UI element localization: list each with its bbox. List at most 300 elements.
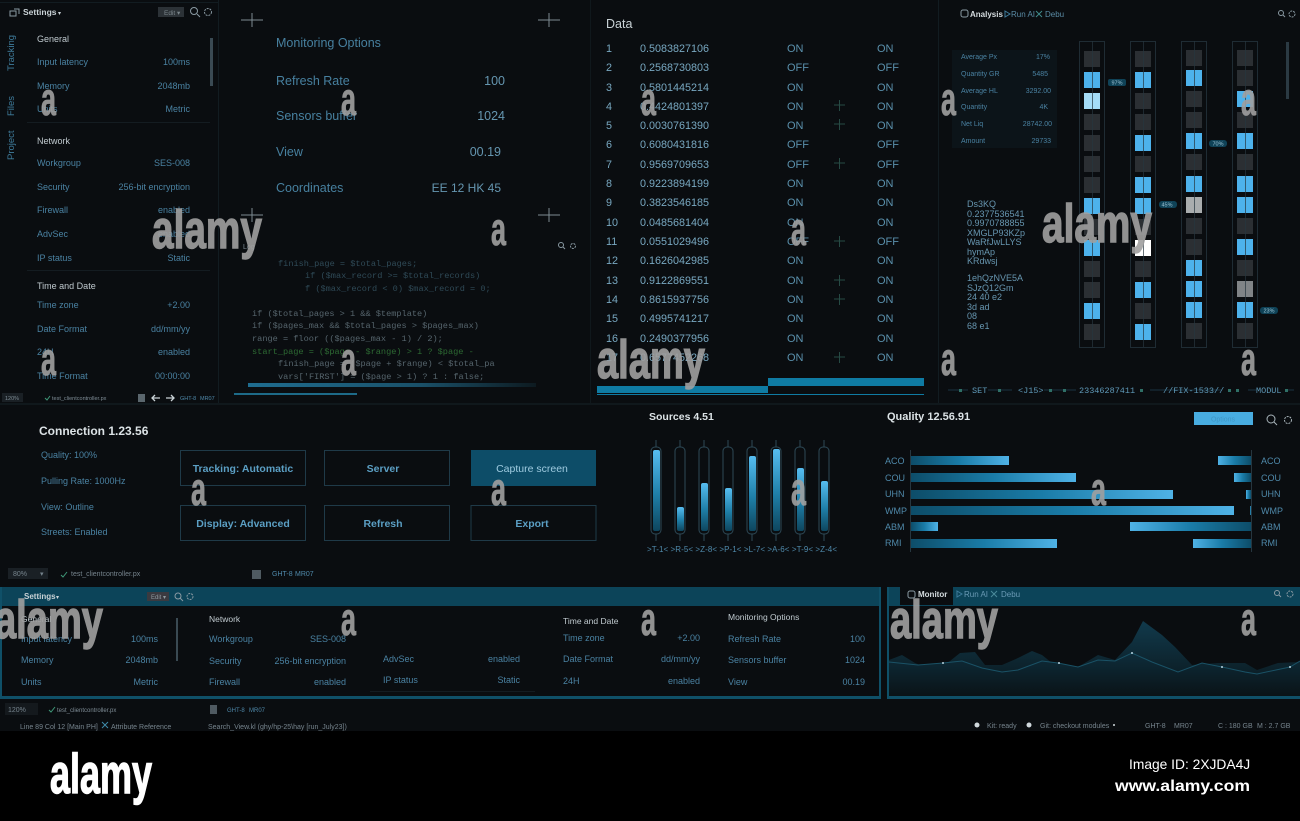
footer logo: alamy <box>50 742 152 805</box>
sidebar status bar: MR07 <box>200 396 215 402</box>
data rows: ON <box>877 333 894 345</box>
sources heading: Sources 4.51 <box>649 411 714 423</box>
code listing: if ($total_pages > 1 && $template) <box>252 309 427 319</box>
bottom general settings <box>21 614 178 687</box>
analysis text readout <box>967 199 1025 331</box>
panel: monitoring options <box>241 13 560 222</box>
general settings: General <box>37 34 69 44</box>
monitoring rows: Coordinates <box>276 181 343 195</box>
data rows: ON <box>877 255 894 267</box>
button: capture screen: Capture screen <box>496 463 568 475</box>
watermark: alamy marks: a <box>1241 593 1256 645</box>
general settings: 100ms <box>163 57 190 67</box>
status bar: test_clientcontroller.px <box>57 708 116 714</box>
cell column 3 <box>1186 50 1202 339</box>
data rows: ON <box>787 120 804 132</box>
general settings: Metric <box>166 104 190 114</box>
bottom network settings: enabled <box>314 677 346 687</box>
monitoring heading: Monitoring Options <box>276 36 381 50</box>
vertical tabs: Files <box>6 96 17 116</box>
row markers <box>834 100 845 363</box>
data heading: Data <box>606 17 632 31</box>
cell column 2 <box>1135 51 1151 340</box>
search and gear icons <box>1267 415 1292 425</box>
watermark: alamy marks: a <box>791 203 806 255</box>
analysis text readout: hymAp <box>967 247 995 257</box>
data progress bars <box>597 378 924 395</box>
bottom network settings: Firewall <box>209 677 240 687</box>
network settings <box>27 136 210 271</box>
bottom network settings: SES-008 <box>310 634 346 644</box>
analysis stats table: 3292.00 <box>1026 88 1051 95</box>
button: display <box>180 506 306 540</box>
analysis ticker strip: SET <box>972 386 987 396</box>
data rows: ON <box>787 294 804 306</box>
data rows: OFF <box>877 236 899 248</box>
panel: monitor chart <box>887 587 1300 699</box>
settings header: Edit ▾ <box>164 10 181 17</box>
cell column 1 <box>1084 51 1100 340</box>
status bar: Line 89 Col 12 [Main PH] <box>20 724 98 731</box>
analysis stats table: Average Px <box>961 54 998 61</box>
panel: data table <box>597 17 924 395</box>
data rows: 3 <box>606 82 612 94</box>
bottom network settings: 256-bit encryption <box>274 656 346 666</box>
status bar <box>5 703 1291 731</box>
data rows: OFF <box>787 62 809 74</box>
bottom general settings: 2048mb <box>125 655 158 665</box>
bottom network settings: IP status <box>383 675 418 685</box>
data rows: 0.4995741217 <box>640 313 709 325</box>
code listing: f ($max_record < 0) $max_record = 0; <box>305 284 491 294</box>
bottom monitoring options: Refresh Rate <box>728 634 781 644</box>
watermark: alamy marks: alamy <box>597 330 705 390</box>
bottom network settings: enabled <box>488 654 520 664</box>
network settings: 256-bit encryption <box>118 182 190 192</box>
panel: code log <box>234 242 576 395</box>
zoom and file status: GHT-8 <box>272 571 293 578</box>
connection details: View: Outline <box>41 502 94 512</box>
analysis header: Debu <box>1045 10 1064 19</box>
monitor header: Monitor <box>918 590 947 599</box>
analysis text readout: 68 e1 <box>967 321 990 331</box>
data rows: 0.0485681404 <box>640 217 709 229</box>
crosshair markers <box>241 13 560 222</box>
data rows: 7 <box>606 159 612 171</box>
analysis stats table: 5485 <box>1032 71 1048 78</box>
analysis stats table: 29733 <box>1032 138 1051 145</box>
bottom time and date settings: enabled <box>668 676 700 686</box>
data rows: 11 <box>606 236 617 248</box>
left bar labels: COU <box>885 473 905 483</box>
watermark: alamy marks: a <box>641 73 656 125</box>
data rows: ON <box>877 217 894 229</box>
quality action button <box>1194 412 1253 425</box>
bottom network settings: Static <box>497 675 520 685</box>
code listing <box>252 259 495 382</box>
bottom settings header: Settings <box>24 592 56 601</box>
time and date settings: +2.00 <box>167 300 190 310</box>
panel: bottom settings <box>0 587 881 699</box>
panel: sources sliders <box>647 411 837 554</box>
vertical tabs: Tracking <box>6 35 17 71</box>
status bar: 120% <box>8 707 26 714</box>
bottom general settings: Units <box>21 677 42 687</box>
analysis stats table <box>952 50 1057 148</box>
zoom and file status: ▾ <box>40 571 44 578</box>
code listing: if ($max_record >= $total_records) <box>305 271 480 281</box>
data rows: ON <box>877 120 894 132</box>
watermark: alamy marks: a <box>491 463 506 515</box>
quality heading: Quality 12.56.91 <box>887 411 970 423</box>
vertical tabs: Project <box>6 130 17 160</box>
bottom monitoring options: View <box>728 677 748 687</box>
zoom and file status: test_clientcontroller.px <box>71 571 141 578</box>
status bar: C : 180 GB <box>1218 723 1253 730</box>
data rows: 12 <box>606 255 618 267</box>
cell column center lines <box>1092 41 1246 347</box>
network settings: enabled <box>158 229 190 239</box>
watermark: alamy marks: a <box>941 333 956 385</box>
time and date settings: enabled <box>158 347 190 357</box>
connection details: Pulling Rate: 1000Hz <box>41 476 126 486</box>
analysis stats table: Quantity GR <box>961 71 1000 78</box>
status bar: MR07 <box>1174 723 1193 730</box>
time and date settings: Date Format <box>37 324 88 334</box>
button: capture screen <box>471 450 596 486</box>
analysis stats table: Net Liq <box>961 121 983 128</box>
bottom network settings <box>209 614 535 692</box>
data rows: 0.0551029496 <box>640 236 709 248</box>
general settings: Units <box>37 104 58 114</box>
watermark: alamy marks: alamy <box>1042 194 1152 254</box>
data rows: ON <box>787 178 804 190</box>
right bar labels: ACO <box>1261 456 1281 466</box>
analysis ticker strip: <J15> <box>1018 386 1044 396</box>
log header <box>243 242 576 251</box>
slider fills <box>653 449 828 531</box>
bottom time and date settings <box>563 616 700 686</box>
left bar labels <box>885 456 907 548</box>
time and date settings: Time Format <box>37 371 88 381</box>
analysis stats table: 28742.00 <box>1023 121 1052 128</box>
data rows: 0.2490377956 <box>640 333 709 345</box>
data rows: 2 <box>606 62 612 74</box>
data rows: 13 <box>606 275 618 287</box>
watermark: alamy marks <box>0 73 1256 650</box>
bottom time and date settings: Time and Date <box>563 616 619 626</box>
data rows: ON <box>787 101 804 113</box>
monitoring rows: 00.19 <box>470 145 501 159</box>
data rows: 9 <box>606 197 612 209</box>
right bar chart <box>1130 456 1251 548</box>
right bar labels: UHN <box>1261 489 1280 499</box>
cell column 4 <box>1237 50 1253 339</box>
data rows <box>606 43 899 364</box>
network settings: Workgroup <box>37 158 81 168</box>
data rows: 0.5083827106 <box>640 43 709 55</box>
data rows: 10 <box>606 217 618 229</box>
analysis text readout: XMGLP93KZp <box>967 228 1025 238</box>
watermark: alamy marks: a <box>641 593 656 645</box>
watermark: alamy marks: a <box>941 73 956 125</box>
button: tracking <box>180 450 306 486</box>
analysis text readout: 08 <box>967 311 977 321</box>
analysis text readout: 0.2377536541 <box>967 209 1025 219</box>
data rows: ON <box>877 313 894 325</box>
analysis ticker strip <box>948 386 1294 396</box>
button: tracking: Tracking: Automatic <box>193 463 293 475</box>
watermark: alamy marks: alamy <box>890 590 998 650</box>
watermark: alamy marks: a <box>1091 463 1106 515</box>
left bar labels: ACO <box>885 456 905 466</box>
network settings: enabled <box>158 205 190 215</box>
data rows: 0.0030761390 <box>640 120 709 132</box>
panel frame <box>0 587 881 699</box>
right bar labels: COU <box>1261 473 1281 483</box>
watermark: alamy marks: a <box>41 333 56 385</box>
monitoring rows: Sensors buffer <box>276 109 357 123</box>
data rows: 0.6577452268 <box>640 352 709 364</box>
connection heading: Connection 1.23.56 <box>39 424 149 438</box>
status bar: MR07 <box>249 708 266 714</box>
zoom and file status: MR07 <box>295 571 314 578</box>
data rows: ON <box>877 43 894 55</box>
button: refresh: Refresh <box>363 518 403 530</box>
time and date settings <box>37 281 190 381</box>
time and date settings: 24H <box>37 347 54 357</box>
analysis text readout: KRdwsj <box>967 256 998 266</box>
status bar: Search_View.kl (ghy/hp-25\hay [run_July23]) <box>208 724 347 731</box>
data rows: OFF <box>877 159 899 171</box>
bottom network settings: Network <box>209 614 241 624</box>
bottom monitoring options: Sensors buffer <box>728 655 786 665</box>
monitoring rows: 1024 <box>477 109 505 123</box>
status bar: Attribute Reference <box>111 724 171 731</box>
data rows: ON <box>787 43 804 55</box>
bottom monitoring options: 1024 <box>845 655 865 665</box>
panel: connection <box>8 424 596 579</box>
analysis text readout: 3d ad <box>967 302 990 312</box>
analysis text readout: WaRfJwLLYS <box>967 237 1022 247</box>
log progress bars <box>234 383 536 395</box>
data rows: 0.4424801397 <box>640 101 709 113</box>
data rows: ON <box>787 82 804 94</box>
slider tracks <box>651 440 829 541</box>
black footer band <box>0 731 1300 821</box>
data rows: 0.9569709653 <box>640 159 709 171</box>
analysis text readout: 24 40 e2 <box>967 292 1002 302</box>
data rows: OFF <box>787 236 809 248</box>
data rows: 5 <box>606 120 612 132</box>
bar axes <box>910 450 1252 552</box>
watermark: alamy marks: alamy <box>152 200 262 260</box>
bottom general settings: 100ms <box>131 634 158 644</box>
footer image id: Image ID: 2XJDA4J <box>1129 757 1250 772</box>
code listing: finish_page = $total_pages; <box>278 259 417 269</box>
bottom time and date settings: dd/mm/yy <box>661 654 700 664</box>
data rows: 14 <box>606 294 618 306</box>
bottom settings header <box>24 592 193 601</box>
cell column frames <box>1080 42 1258 348</box>
data rows: 6 <box>606 139 612 151</box>
data rows: 8 <box>606 178 612 190</box>
right bar labels: RMI <box>1261 538 1278 548</box>
bottom network settings: AdvSec <box>383 654 415 664</box>
watermark: alamy marks: a <box>1241 333 1256 385</box>
zoom and file status <box>8 568 314 579</box>
button: server <box>324 450 450 486</box>
vertical tabs <box>6 35 17 160</box>
connection details <box>41 450 126 537</box>
right bar labels <box>1261 456 1283 548</box>
bottom time and date settings: Time zone <box>563 633 605 643</box>
analysis stats table: Quantity <box>961 104 988 111</box>
general settings: 2048mb <box>157 81 190 91</box>
time and date settings: dd/mm/yy <box>151 324 190 334</box>
left bar labels: ABM <box>885 522 905 532</box>
sidebar status bar: 120% <box>5 396 19 402</box>
scrollbar <box>1286 42 1289 99</box>
bottom time and date settings: 24H <box>563 676 580 686</box>
status bar: GHT-8 <box>227 708 245 714</box>
data rows: ON <box>877 352 894 364</box>
bottom time and date settings: +2.00 <box>677 633 700 643</box>
data rows: ON <box>877 178 894 190</box>
data rows: ON <box>787 313 804 325</box>
settings header: ▾ <box>58 11 61 17</box>
right bar labels: WMP <box>1261 506 1283 516</box>
sidebar status bar <box>2 393 215 402</box>
zoom and file status: 80% <box>13 571 27 578</box>
monitoring rows: Refresh Rate <box>276 74 350 88</box>
status bar: M : 2.7 GB <box>1257 723 1291 730</box>
sidebar status bar: test_clientcontroller.px <box>52 396 107 402</box>
monitoring rows <box>276 74 505 195</box>
data rows: 0.8615937756 <box>640 294 709 306</box>
data rows: ON <box>787 333 804 345</box>
data rows: 17 <box>606 352 618 364</box>
data rows: 0.9122869551 <box>640 275 709 287</box>
watermark: alamy marks: a <box>191 463 206 515</box>
connection details: Streets: Enabled <box>41 527 108 537</box>
watermark: alamy marks: a <box>341 73 356 125</box>
left bar chart <box>911 456 1234 548</box>
left bar labels: WMP <box>885 506 907 516</box>
data rows: 16 <box>606 333 618 345</box>
button: export: Export <box>515 518 549 530</box>
slider labels: >T-1< >R-5< >Z-8< >P-1< >L-7< >A-6< >T-9< >Z-4< <box>647 545 837 554</box>
data rows: 0.6080431816 <box>640 139 709 151</box>
data rows: 15 <box>606 313 618 325</box>
network settings: IP status <box>37 253 72 263</box>
data rows: 0.2568730803 <box>640 62 709 74</box>
panel frame <box>887 587 1300 699</box>
analysis ticker strip: //FIX-1533// <box>1163 386 1224 396</box>
status bar: GHT-8 <box>1145 723 1166 730</box>
data rows: 1 <box>606 43 612 55</box>
network settings: AdvSec <box>37 229 69 239</box>
percent badges: 97% <box>1111 80 1123 86</box>
watermark: alamy marks: a <box>341 593 356 645</box>
data rows: 0.1626042985 <box>640 255 709 267</box>
general settings: Memory <box>37 81 70 91</box>
status bar: Git: checkout modules <box>1040 723 1110 730</box>
code listing: start_page = ($page - $range) > 1 ? $page - <box>252 347 474 357</box>
data rows: ON <box>787 352 804 364</box>
data rows: 0.3823546185 <box>640 197 709 209</box>
network settings: Firewall <box>37 205 68 215</box>
general settings: Input latency <box>37 57 89 67</box>
bottom monitoring options: 100 <box>850 634 865 644</box>
sidebar status bar: GHT-8 <box>180 396 196 402</box>
general settings <box>27 34 210 123</box>
settings header <box>10 7 212 17</box>
data rows: ON <box>877 82 894 94</box>
button: refresh <box>324 506 450 540</box>
data rows: 4 <box>606 101 612 113</box>
analysis header: Analysis <box>970 10 1003 19</box>
data rows: ON <box>787 255 804 267</box>
network settings: Security <box>37 182 70 192</box>
panel: settings sidebar <box>2 7 215 402</box>
network settings: SES-008 <box>154 158 190 168</box>
bottom monitoring options <box>728 612 865 687</box>
bottom settings header: ▾ <box>56 595 59 601</box>
bottom network settings: Workgroup <box>209 634 253 644</box>
panel: analysis <box>948 10 1295 396</box>
area chart <box>889 621 1300 696</box>
quality action button: Options <box>1211 416 1236 424</box>
analysis text readout: Ds3KQ <box>967 199 996 209</box>
watermark: alamy marks: a <box>491 203 506 255</box>
button: server: Server <box>367 463 399 475</box>
data rows: ON <box>787 217 804 229</box>
analysis stats table: Amount <box>961 138 985 145</box>
monitor header <box>908 590 1293 599</box>
bottom monitoring options: 00.19 <box>842 677 865 687</box>
log header: Log <box>243 244 255 251</box>
data rows: OFF <box>787 139 809 151</box>
watermark: alamy marks: a <box>791 463 806 515</box>
analysis ticker strip: MODUL <box>1256 386 1282 396</box>
analysis header: Run AI <box>1011 10 1035 19</box>
analysis header <box>961 10 1295 19</box>
bottom general settings: General <box>21 614 51 624</box>
left bar labels: RMI <box>885 538 902 548</box>
monitoring rows: 100 <box>484 74 505 88</box>
percent badges: 70% <box>1212 142 1224 148</box>
bottom general settings: Input latency <box>21 634 73 644</box>
percent badges: 23% <box>1263 308 1275 314</box>
analysis ticker strip: 23346287411 <box>1079 386 1135 396</box>
analysis stats table: 17% <box>1036 54 1050 61</box>
bottom monitoring options: Monitoring Options <box>728 612 799 622</box>
settings header: Settings <box>23 7 57 17</box>
footer image id <box>1114 757 1250 795</box>
data rows: OFF <box>877 139 899 151</box>
scrollbar <box>210 38 213 86</box>
monitor header: Debu <box>1001 590 1020 599</box>
analysis text readout: 0.9970788855 <box>967 218 1025 228</box>
panel: quality bars <box>885 411 1292 552</box>
monitoring rows: View <box>276 145 304 159</box>
data rows: 0.9223894199 <box>640 178 709 190</box>
analysis text readout: SJzQ12Gm <box>967 283 1014 293</box>
data rows: OFF <box>787 159 809 171</box>
watermark: alamy marks: a <box>341 333 356 385</box>
data rows: ON <box>877 275 894 287</box>
